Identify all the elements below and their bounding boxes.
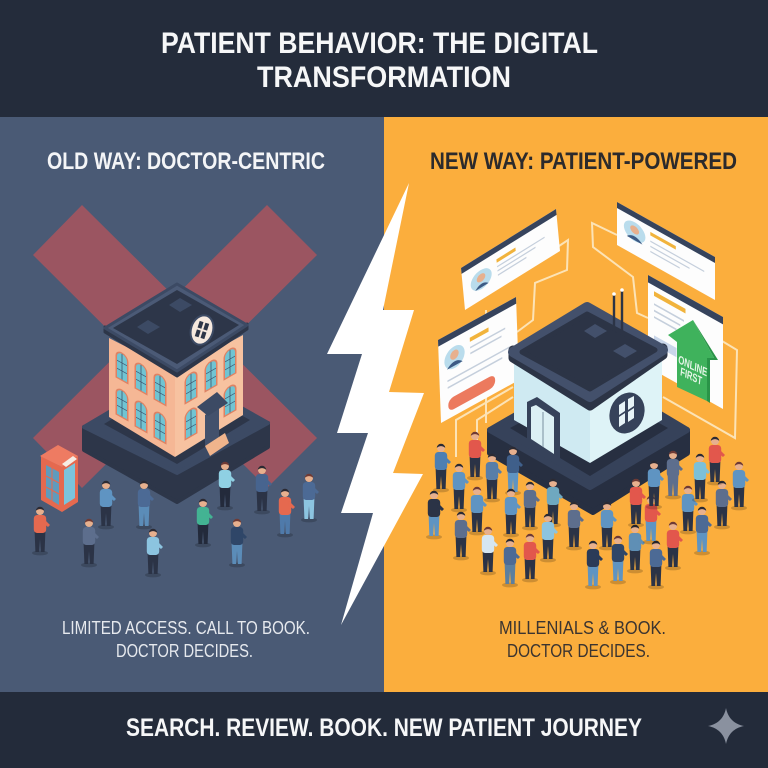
- door and porch: [197, 392, 229, 456]
- text: old way caption: DOCTOR DECIDES.: [116, 641, 253, 661]
- footer band: [0, 692, 768, 768]
- people: crowd of patients: [426, 432, 749, 589]
- icon: green online first arrow: FIRST: [680, 366, 703, 388]
- panel: new way: [384, 117, 768, 692]
- icon: green online first arrow: ONLINE: [678, 354, 708, 380]
- round roof window: [186, 311, 218, 349]
- windows: [116, 345, 236, 445]
- icon: white lightning bolt divider: [327, 183, 424, 625]
- red X behind old clinic: [33, 205, 317, 488]
- header band: [0, 0, 768, 117]
- review card top right: [617, 202, 715, 300]
- icon: green online first arrow: [668, 320, 718, 403]
- double door: [527, 397, 560, 460]
- text: new way caption: MILLENIALS & BOOK.: [499, 618, 666, 638]
- icon: red phone booth: [40, 445, 78, 512]
- walls: [514, 360, 590, 463]
- walls: [109, 338, 175, 457]
- text: new way caption: [499, 618, 666, 661]
- title: [161, 27, 598, 94]
- review card left: [438, 297, 519, 423]
- review card right: [648, 275, 723, 409]
- platform: [84, 372, 268, 502]
- icon: old clinic building: [84, 284, 268, 502]
- review card top left: [461, 209, 560, 310]
- roof: [513, 307, 663, 406]
- panel: old way: [0, 117, 384, 692]
- icon: four-point sparkle: [708, 708, 744, 744]
- title: TRANSFORMATION: [257, 61, 511, 94]
- text: old way caption: LIMITED ACCESS. CALL TO BOOK.: [62, 618, 310, 638]
- icon: modern clinic building: [490, 288, 687, 512]
- round window: [603, 387, 651, 439]
- heading: old way: OLD WAY: DOCTOR-CENTRIC: [47, 148, 325, 175]
- platform: [490, 372, 687, 512]
- text: new way caption: DOCTOR DECIDES.: [507, 641, 650, 661]
- title: PATIENT BEHAVIOR: THE DIGITAL: [161, 27, 598, 60]
- roof: [105, 284, 247, 376]
- antennas: [612, 288, 624, 333]
- connector lines: [456, 223, 737, 457]
- footer text: SEARCH. REVIEW. BOOK. NEW PATIENT JOURNEY: [126, 714, 642, 742]
- text: old way caption: [62, 618, 310, 661]
- people: few patients: [32, 462, 319, 577]
